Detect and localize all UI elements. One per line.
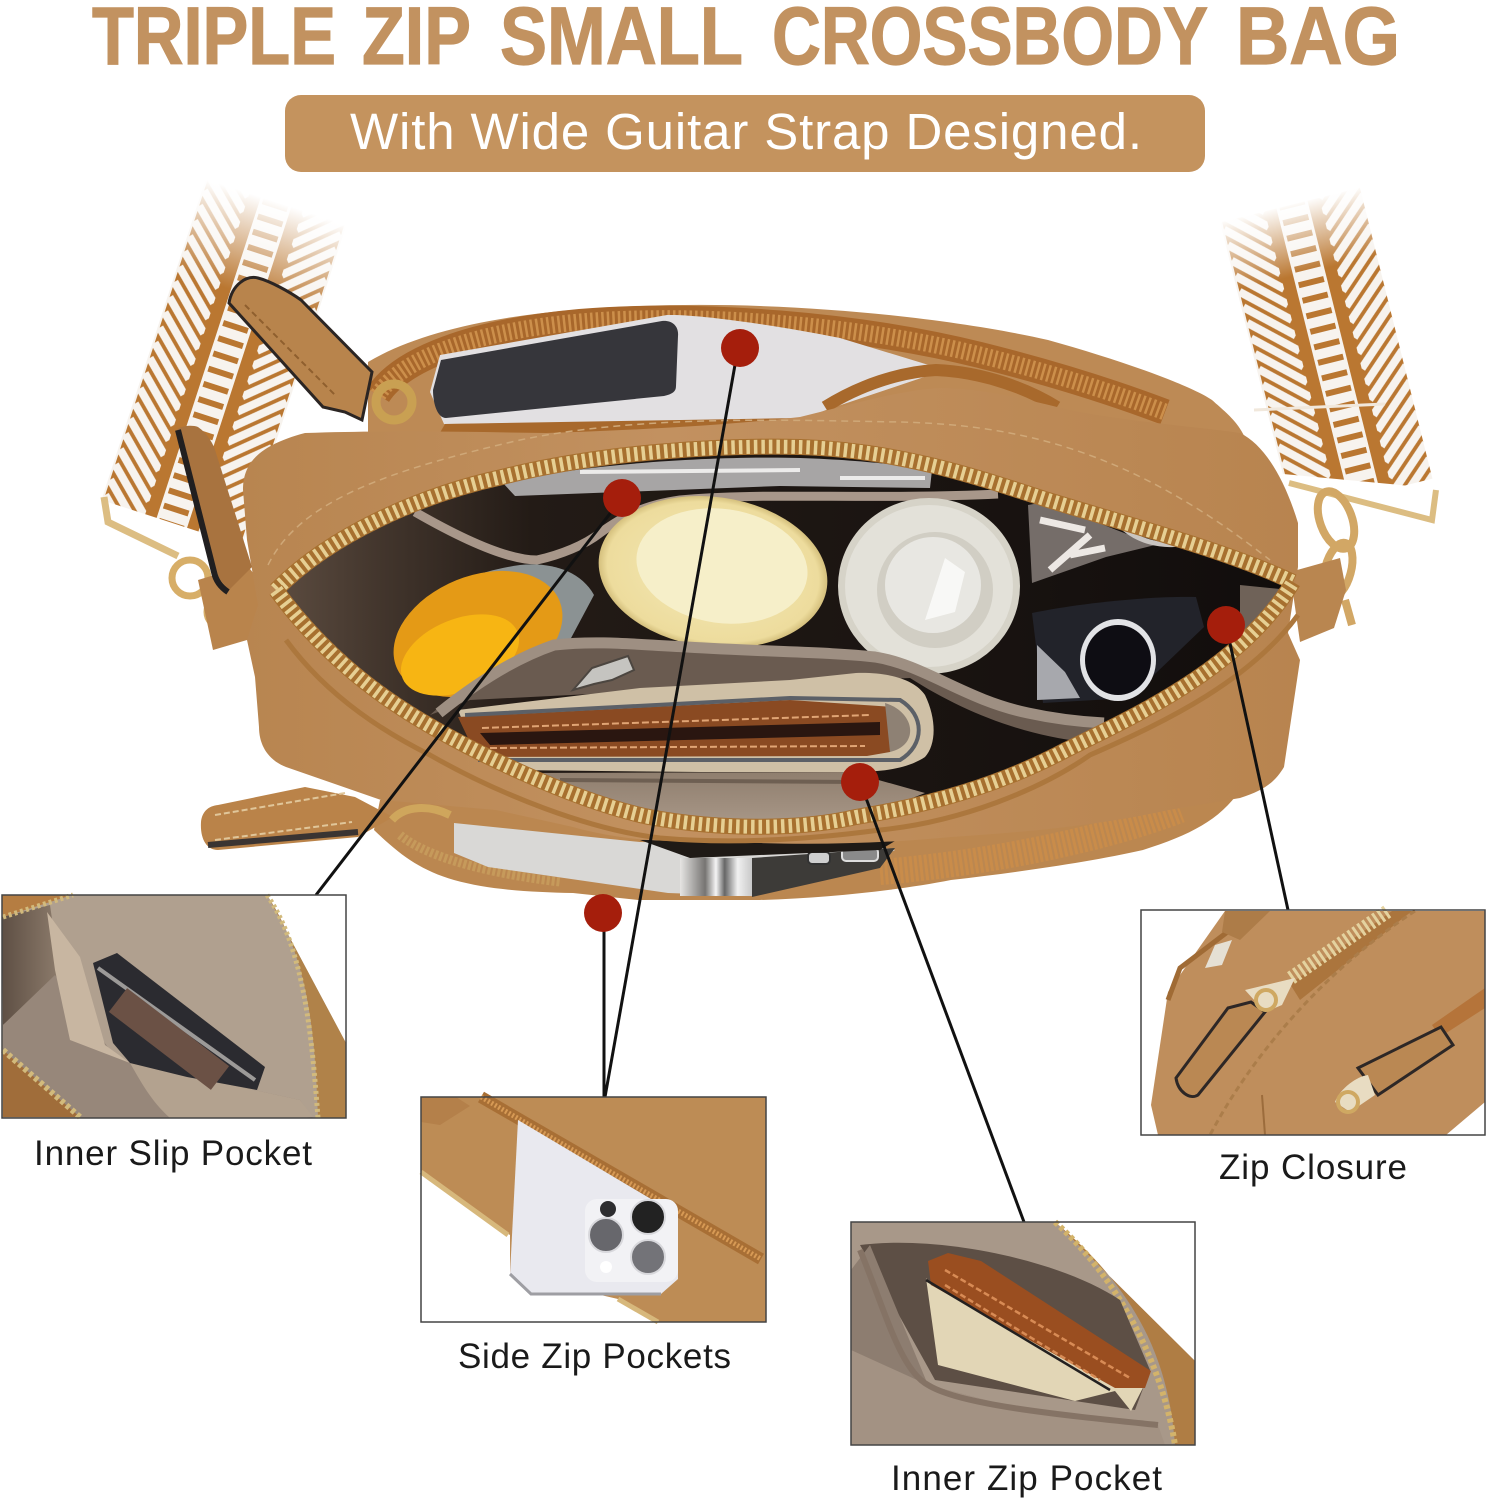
back zipper teeth [378, 319, 1165, 412]
inset: zip closure [1141, 910, 1485, 1135]
right chain hardware [1311, 486, 1361, 625]
pocket cord above front leather [825, 370, 1057, 407]
lower-left puller [176, 426, 252, 592]
open interior [276, 447, 1293, 827]
main zipper lower tape [276, 582, 1293, 827]
callout lines [316, 348, 1288, 1222]
right guitar strap [1207, 148, 1455, 540]
upper puller [229, 277, 412, 420]
subtitle banner: With Wide Guitar Strap Designed. [350, 103, 1142, 160]
left strap buckle [104, 497, 178, 556]
inner slip pocket edge [415, 494, 998, 560]
power bank [430, 315, 945, 424]
main zipper lower teeth [276, 582, 1293, 827]
inner pocket taupe [430, 645, 1110, 742]
stitched seam on front leather [268, 420, 1270, 565]
left hardware cluster [172, 560, 265, 636]
lower puller [201, 787, 450, 850]
callout dots [584, 329, 1245, 932]
lower lining [527, 772, 925, 824]
product photo: crossbody bag [98, 128, 1455, 900]
chrome highlights on phone [580, 470, 925, 478]
lower zipper [400, 835, 560, 882]
stitch on lower lining [560, 780, 860, 782]
main zipper upper tape [276, 447, 1293, 590]
right strap buckle [1289, 483, 1436, 520]
lower rear compartment [374, 790, 1240, 900]
inner zip pull [573, 656, 634, 690]
black bottle [1032, 597, 1204, 703]
white bottle [838, 498, 1020, 674]
wallet [458, 673, 934, 772]
main bag body [243, 388, 1300, 844]
label: inner zip pocket: Inner Zip Pocket [891, 1459, 1162, 1498]
label: inner slip pocket: Inner Slip Pocket [34, 1134, 312, 1173]
strip below power bank [430, 418, 800, 450]
inset: inner slip pocket [2, 895, 346, 1118]
inset: inner zip pocket [851, 1222, 1195, 1445]
inset: side zip pockets [421, 1097, 766, 1322]
back zipper [378, 319, 1165, 412]
right side tab [1290, 558, 1346, 642]
silver phone at top of interior [502, 458, 932, 496]
label: side zip pockets: Side Zip Pockets [458, 1337, 731, 1376]
main zipper upper teeth [276, 447, 1293, 590]
phone in side pocket [454, 823, 900, 897]
title [92, 0, 1400, 82]
inner pocket zip edge [439, 643, 1104, 723]
cream jar [589, 482, 837, 662]
lower mesh zip [880, 810, 1180, 872]
lower puller cord and left tab [198, 565, 274, 650]
foil pouch [1028, 502, 1195, 583]
label: zip closure: Zip Closure [1219, 1148, 1407, 1187]
zip tape lower [286, 615, 1298, 841]
right interior lining [1240, 585, 1290, 632]
back compartment leather [368, 305, 1252, 470]
left guitar strap [98, 128, 367, 547]
subtitle banner [285, 95, 1205, 172]
orange bottle [375, 547, 594, 721]
